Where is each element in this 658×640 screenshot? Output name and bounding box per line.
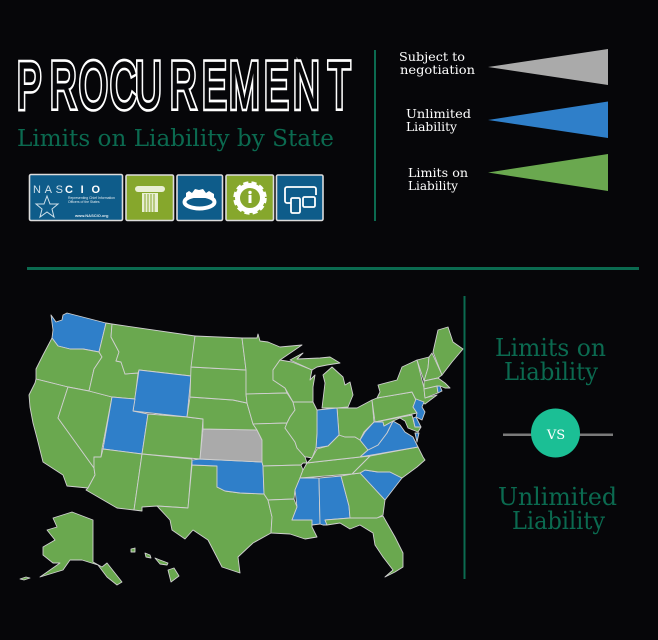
state: Hawaii Maui <box>155 558 168 565</box>
state: Michigan lower peninsula <box>322 367 353 408</box>
state: Arizona <box>86 449 142 510</box>
state: Texas <box>157 465 272 573</box>
legend item: subject to negotiation: Subject to <box>399 50 465 64</box>
state: Rhode Island <box>437 386 442 393</box>
state: Connecticut <box>424 386 438 398</box>
state: New Jersey <box>413 399 425 420</box>
legend item: unlimited liability <box>406 102 608 138</box>
state: Indiana <box>316 408 339 448</box>
heading: limits on liability: Limits on <box>495 334 606 362</box>
state: Michigan upper peninsula <box>290 353 340 370</box>
state: Idaho <box>89 323 138 399</box>
logo: NASCIO <box>30 174 122 220</box>
subtitle: Limits on Liability by State <box>17 126 334 152</box>
legend <box>399 49 608 193</box>
logo: pillar icon <box>126 175 174 220</box>
legend item: unlimited liability: Liability <box>406 120 457 134</box>
logo: NASCIO: NAS <box>33 184 63 196</box>
state: West Virginia <box>360 421 393 450</box>
state: Georgia <box>341 473 385 518</box>
state: Oregon <box>36 338 102 391</box>
state: Massachusetts <box>424 378 450 389</box>
legend item: limits on liability: Limits on <box>408 166 468 180</box>
state: Kansas <box>200 429 262 462</box>
state: Delaware <box>413 417 421 427</box>
legend item: subject to negotiation <box>399 49 608 85</box>
heading: limits on liability: Liability <box>504 358 598 386</box>
state: Maryland <box>375 415 421 432</box>
state: Vermont <box>417 357 429 381</box>
divider: horizontal <box>27 267 639 270</box>
title: PROCUREMENT <box>17 50 351 123</box>
state: New York <box>377 360 437 404</box>
state: South Carolina <box>360 470 402 500</box>
state: Louisiana <box>268 499 317 539</box>
divider: header vertical <box>374 50 376 221</box>
state: Virginia eastern shore <box>415 433 419 442</box>
state: Wisconsin <box>273 360 315 402</box>
logo: NASCIO: Officers of the States <box>68 200 100 204</box>
state: Aleutian islands <box>20 577 30 580</box>
logo: gear info icon <box>226 175 274 220</box>
US map <box>20 313 463 585</box>
heading: unlimited liability: Unlimited <box>498 483 617 511</box>
logo row <box>30 174 323 220</box>
state: Illinois <box>285 402 317 458</box>
logo: crown icon <box>177 175 222 220</box>
state: Washington <box>51 313 106 352</box>
state: Montana <box>111 324 195 376</box>
state: Hawaii Oahu <box>145 553 151 558</box>
state: Nevada <box>58 387 112 468</box>
state: North Dakota <box>191 336 246 370</box>
state: Pennsylvania <box>372 392 417 422</box>
state: Oklahoma <box>192 459 264 494</box>
state: Hawaii big island <box>168 568 179 582</box>
logo: NASCIO: Representing Chief Information <box>68 196 115 200</box>
state: Minnesota <box>242 334 302 394</box>
vs badge: VS <box>546 428 565 443</box>
state: South Dakota <box>190 367 247 403</box>
state: Virginia <box>360 421 418 457</box>
state: Tennessee <box>300 456 370 478</box>
state: Ohio <box>337 400 374 440</box>
title: PROCUREMENT <box>17 50 351 123</box>
state: New Mexico <box>134 454 192 511</box>
legend item: subject to negotiation: negotiation <box>400 63 475 77</box>
logo: devices icon <box>276 175 323 220</box>
state: Wyoming <box>133 370 191 417</box>
legend item: unlimited liability: Unlimited <box>406 107 471 121</box>
state: Missouri <box>253 423 307 466</box>
state: North Carolina <box>352 447 425 478</box>
state: Hawaii Kauai <box>131 548 135 552</box>
state: Nebraska <box>187 397 257 430</box>
state: Mississippi <box>292 478 320 525</box>
vs badge <box>503 408 613 458</box>
state: Colorado <box>142 414 203 459</box>
state: New Hampshire <box>424 353 442 381</box>
state: Alabama <box>319 476 350 525</box>
logo: NASCIO: www.NASCIO.org <box>74 213 109 218</box>
state: California <box>29 379 95 488</box>
legend item: limits on liability: Liability <box>408 179 458 193</box>
state: Iowa <box>246 393 295 424</box>
divider: map vertical <box>464 296 466 579</box>
state: Alaska <box>40 512 122 585</box>
state: Kentucky <box>307 435 368 463</box>
state: Florida <box>325 516 403 577</box>
logo: NASCIO: CIO <box>65 184 100 196</box>
legend item: limits on liability <box>408 154 608 193</box>
state: Arkansas <box>263 465 303 500</box>
state: Maine <box>433 327 463 375</box>
state: Utah <box>103 397 148 454</box>
heading: unlimited liability: Liability <box>512 507 605 535</box>
